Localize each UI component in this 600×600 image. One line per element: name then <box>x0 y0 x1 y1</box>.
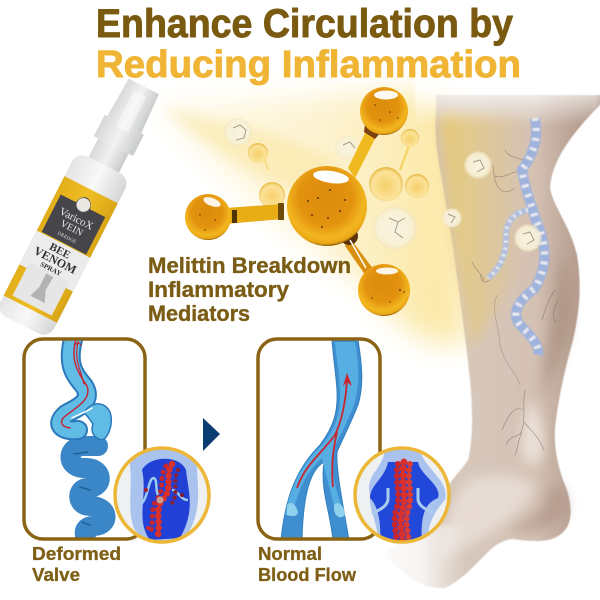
bonds <box>225 204 283 224</box>
main golden molecule <box>185 87 410 316</box>
heading: melittin caption: Inflammatory <box>148 277 290 302</box>
product text: BEE <box>47 241 72 262</box>
yellow label <box>4 176 118 323</box>
dark plaque <box>42 194 106 255</box>
leg silhouette <box>385 95 600 588</box>
normal vein illustration <box>281 340 362 540</box>
highlights <box>312 169 350 185</box>
deformed vein illustration <box>60 332 111 550</box>
frame <box>24 339 145 539</box>
heading: melittin caption: Melittin Breakdown <box>148 253 351 278</box>
white band <box>19 230 90 292</box>
label: deformed valve: Valve <box>32 565 80 585</box>
brand text: VaricoX <box>57 205 95 233</box>
leg shading <box>540 250 571 400</box>
label: normal blood flow <box>258 544 357 585</box>
label: normal blood flow: Blood Flow <box>258 565 357 585</box>
thin veins <box>472 150 558 455</box>
product: bee venom spray bottle: VEIN <box>58 218 85 239</box>
magnified vein circle <box>355 448 449 550</box>
label: normal blood flow: Normal <box>258 544 322 564</box>
heading: melittin caption <box>148 253 351 326</box>
heading: melittin caption: Mediators <box>148 301 250 326</box>
white panel <box>12 268 66 316</box>
spray glow <box>158 92 465 345</box>
pale molecules in the background <box>224 118 542 252</box>
product: bee venom spray bottle: VENOM <box>32 243 79 277</box>
product: bee venom spray bottle: DREDGE <box>56 231 77 245</box>
title: Enhance Circulation by <box>96 2 513 46</box>
top fade <box>415 78 600 126</box>
label: deformed valve <box>32 544 121 585</box>
label: deformed valve: Deformed <box>32 544 121 564</box>
product: bee venom spray bottle: SPRAY <box>39 260 63 278</box>
specks <box>199 104 405 303</box>
frame <box>258 339 380 539</box>
cap <box>107 78 161 133</box>
arrow <box>203 418 220 451</box>
flow arrows <box>297 378 347 488</box>
balls <box>287 166 367 246</box>
title: Reducing Inflammation <box>96 44 521 86</box>
foot fade <box>375 525 465 600</box>
varicose vein <box>488 118 544 355</box>
panel: normal blood flow <box>258 339 449 585</box>
illustration: leg with varicose veins <box>375 78 600 600</box>
small leg icon <box>30 274 54 303</box>
magnified valve circle <box>115 448 209 544</box>
title <box>96 2 521 86</box>
panel: deformed valve <box>24 332 209 585</box>
yellow tint on leg <box>438 112 530 350</box>
bottle body <box>0 151 131 339</box>
product: bee venom spray bottle <box>0 78 159 335</box>
